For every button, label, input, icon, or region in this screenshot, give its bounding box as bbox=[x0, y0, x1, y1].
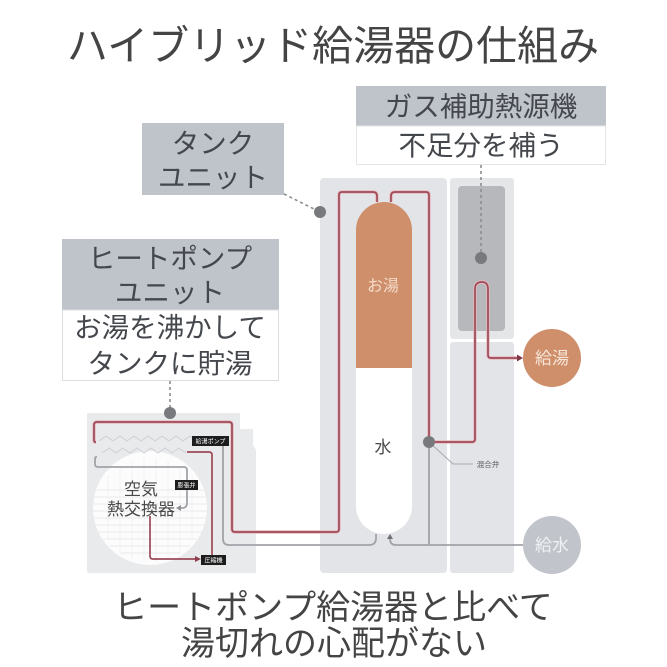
arrow: to compressor bbox=[195, 556, 201, 562]
arrow: to hot water bbox=[517, 354, 523, 362]
title: ハイブリッド給湯器の仕組み bbox=[67, 23, 599, 69]
circle: water supply: 給水 bbox=[535, 536, 569, 555]
pipe: coil to compressor bbox=[187, 452, 212, 555]
tank: hot water bbox=[356, 202, 412, 368]
tank: water bbox=[356, 368, 412, 534]
badge: expansion valve: 膨張弁 bbox=[177, 482, 196, 490]
circle: hot water supply bbox=[523, 329, 581, 387]
callout: gas auxiliary heat source bbox=[356, 86, 606, 264]
pipe: outdoor unit to tank loop bbox=[94, 192, 377, 532]
arrow: water into tank bbox=[387, 534, 393, 539]
conclusion text: 湯切れの心配がない bbox=[181, 625, 487, 663]
callout: mixing valve bbox=[423, 436, 500, 469]
coil waves bbox=[99, 436, 197, 453]
circle: air heat exchanger bbox=[93, 451, 207, 565]
callout: tank unit: タンク bbox=[172, 128, 254, 159]
circle: water supply bbox=[523, 516, 581, 574]
callout: heat pump unit: タンクに貯湯 bbox=[88, 348, 252, 379]
badge: compressor: 圧縮機 bbox=[204, 556, 223, 564]
label: hot water in tank: お湯 bbox=[367, 277, 399, 295]
callout: gas auxiliary heat source: ガス補助熱源機 bbox=[385, 91, 577, 122]
panel: gas auxiliary housing lower bbox=[450, 342, 514, 573]
pipe: tank top to mixing valve bbox=[391, 192, 429, 442]
badge: hot water pump: 給湯ポンプ bbox=[196, 438, 225, 446]
callout: heat pump unit bbox=[62, 239, 279, 419]
pipe: exchanger to compressor bbox=[150, 516, 196, 559]
pipe: grey return in outdoor unit bbox=[95, 457, 187, 508]
callout: tank unit: ユニット bbox=[158, 162, 268, 193]
pipe: grey to tank bottom bbox=[223, 446, 376, 545]
badge: expansion valve bbox=[175, 480, 198, 490]
panel: tank unit housing bbox=[320, 178, 447, 573]
callout: heat pump unit: ユニット bbox=[115, 277, 225, 308]
badge: hot water pump bbox=[192, 436, 229, 446]
arrow: expansion valve bbox=[176, 505, 181, 511]
panel: gas auxiliary housing upper bbox=[450, 178, 514, 339]
callout: tank unit bbox=[142, 123, 326, 218]
label: water in tank: 水 bbox=[374, 438, 392, 457]
badge: compressor bbox=[201, 555, 226, 565]
callout: heat pump unit: ヒートポンプ bbox=[88, 243, 253, 274]
label: air heat exchanger: 空気 bbox=[124, 480, 158, 499]
label: air heat exchanger: 熱交換器 bbox=[107, 500, 175, 519]
pipe: mixing valve to gas unit and hot water bbox=[429, 282, 518, 442]
pipe: supply water bbox=[390, 538, 524, 545]
panel: gas heat source bbox=[458, 186, 505, 331]
pipe: mixing valve supply bbox=[428, 442, 430, 545]
circle: hot water supply: 給湯 bbox=[535, 349, 569, 368]
callout: heat pump unit: お湯を沸かして bbox=[74, 312, 266, 343]
panel: outdoor heat pump unit bbox=[87, 413, 256, 573]
conclusion text: ヒートポンプ給湯器と比べて bbox=[113, 589, 553, 627]
callout: mixing valve: 混合弁 bbox=[477, 459, 500, 469]
conclusion text bbox=[113, 589, 553, 663]
callout: gas auxiliary heat source: 不足分を補う bbox=[398, 130, 564, 161]
